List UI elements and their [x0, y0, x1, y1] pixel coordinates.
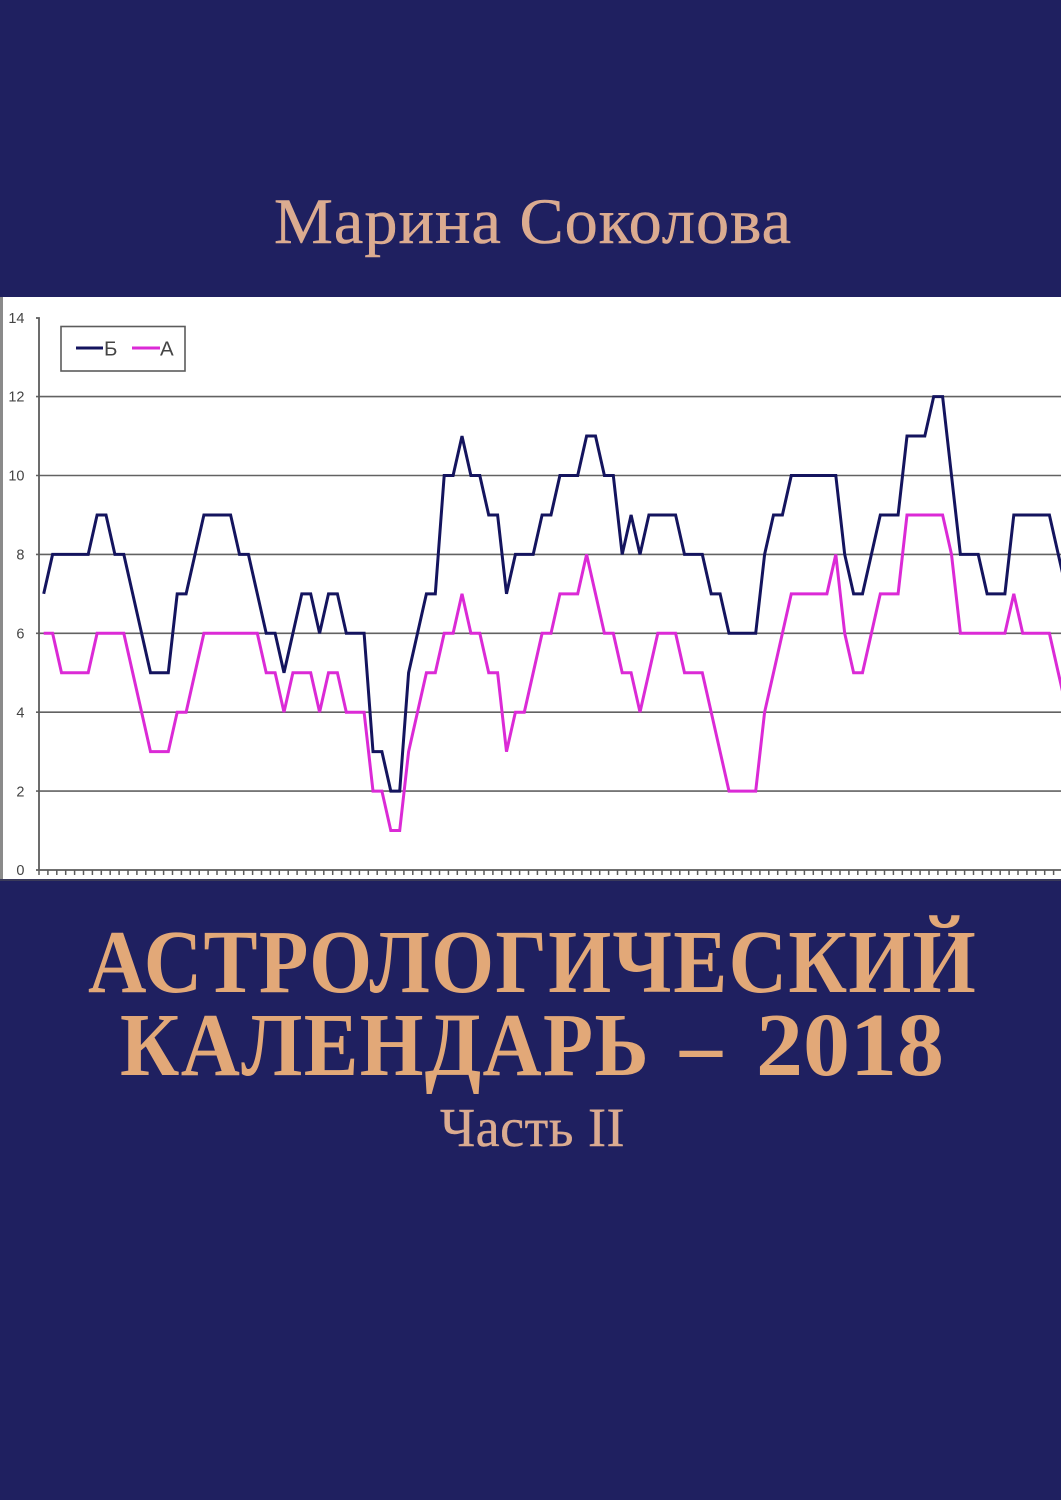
y-axis labels: 12 — [8, 390, 24, 406]
data series Б (navy line) — [44, 397, 1061, 791]
chart background — [0, 297, 1061, 880]
y-axis labels: 10 — [8, 468, 24, 484]
panel: line chart — [0, 297, 1061, 881]
subtitle: Часть II — [440, 1097, 625, 1158]
grid lines — [36, 397, 1061, 791]
title line 1: АСТРОЛОГИЧЕСКИЙ — [88, 913, 977, 1012]
y-axis labels — [8, 311, 24, 879]
y-axis labels: 4 — [16, 706, 24, 722]
y-axis labels: 6 — [16, 626, 24, 642]
legend — [61, 326, 185, 371]
title line 2: 2018 — [756, 996, 944, 1095]
y-axis labels: 2 — [16, 784, 24, 800]
axes with ticks — [36, 318, 1061, 875]
y-axis labels: 8 — [16, 548, 24, 564]
legend: Б — [104, 338, 117, 360]
title line 2: – — [679, 996, 723, 1095]
data series А (magenta line) — [44, 515, 1061, 831]
legend: А — [160, 338, 174, 360]
title line 2: КАЛЕНДАРЬ — [120, 996, 650, 1095]
y-axis labels: 0 — [16, 863, 24, 879]
author name: Марина Соколова — [274, 186, 792, 258]
y-axis labels: 14 — [8, 311, 24, 327]
